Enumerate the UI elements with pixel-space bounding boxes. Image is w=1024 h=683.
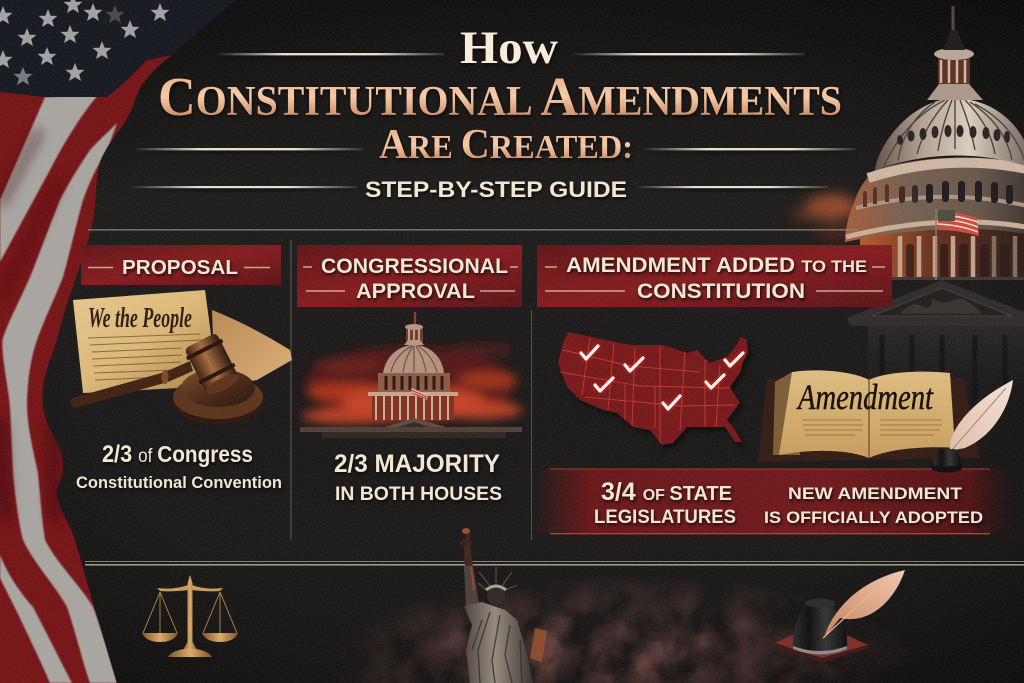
- text: 2/3 of Congress: 2/3 of Congress: [102, 441, 253, 468]
- text: 2/3 majority: 2/3 MAJORITY: [334, 450, 500, 478]
- text: 2/3 of Congress: Constitutional Convention: [76, 473, 282, 492]
- icon: gavel: [71, 332, 263, 424]
- text: new amendment adopted: NEW AMENDMENT: [788, 484, 963, 503]
- open book: [758, 370, 980, 462]
- flag fold shading: [0, 130, 60, 520]
- heading: amendment added: AMENDMENT ADDED TO THE: [566, 254, 867, 277]
- heading: amendment added: CONSTITUTION: [637, 280, 805, 303]
- heading: congressional approval: APPROVAL: [356, 280, 475, 303]
- open book: Amendment: [796, 377, 934, 417]
- bottom divider: [85, 561, 1024, 566]
- icon: inkwell with quill: [775, 570, 905, 663]
- panel: proposal: [71, 245, 292, 492]
- panel: congressional approval: [297, 245, 522, 505]
- title line: Are Created: ARE CREATED:: [379, 122, 633, 168]
- illustration: capitol with red sky: [300, 312, 522, 438]
- icon: scales of justice: [142, 575, 238, 657]
- map of the united states: [558, 332, 751, 449]
- text: 3/4 of state legislatures: [594, 478, 736, 528]
- column divider 1: [290, 240, 292, 540]
- title line: How: How: [460, 22, 558, 74]
- map checkmarks: [581, 346, 743, 409]
- colonnade: [860, 226, 1024, 280]
- rotunda drum: [845, 158, 1024, 242]
- text: 3/4 of state legislatures: LEGISLATURES: [594, 507, 736, 528]
- text: new amendment adopted: IS OFFICIALLY ADOPTED: [764, 508, 983, 527]
- heading: proposal: PROPOSAL: [122, 257, 238, 279]
- column divider 2: [531, 310, 532, 540]
- orange cloud glow: [790, 194, 858, 239]
- statue of liberty: [460, 528, 547, 683]
- dome: [875, 98, 1024, 170]
- heading: proposal: [81, 245, 281, 285]
- subtitle: STEP-BY-STEP GUIDE: [365, 177, 627, 202]
- pediment: [847, 280, 1024, 326]
- heading: congressional approval: [297, 245, 522, 307]
- capitol building, top right: [790, 6, 1024, 408]
- heading: congressional approval: CONGRESSIONAL: [321, 255, 508, 278]
- lantern: [927, 84, 983, 100]
- flag white stripes: [0, 95, 117, 683]
- text: 2/3 majority: IN BOTH HOUSES: [335, 484, 502, 505]
- panel: amendment added: [535, 245, 1015, 534]
- american flag drape: [0, 0, 235, 683]
- text: 2/3 of Congress: [76, 441, 282, 492]
- flag on capitol: [936, 209, 979, 280]
- top divider: [88, 229, 858, 231]
- quill and inkwell: [931, 380, 1013, 472]
- icon: parchment documents: [73, 290, 292, 393]
- title block: [130, 22, 856, 202]
- icon: parchment documents: We the People: [88, 303, 192, 334]
- text: 2/3 majority: [334, 450, 502, 505]
- title line: Constitutional Amendments: CONSTITUTIONAL AMENDMENTS: [158, 66, 842, 127]
- heading: amendment added: [537, 245, 892, 307]
- results strip: [535, 468, 1015, 534]
- text: new amendment adopted: [764, 484, 983, 527]
- flag canton with stars: [0, 0, 235, 97]
- text: 3/4 of state legislatures: 3/4 OF STATE: [601, 478, 732, 506]
